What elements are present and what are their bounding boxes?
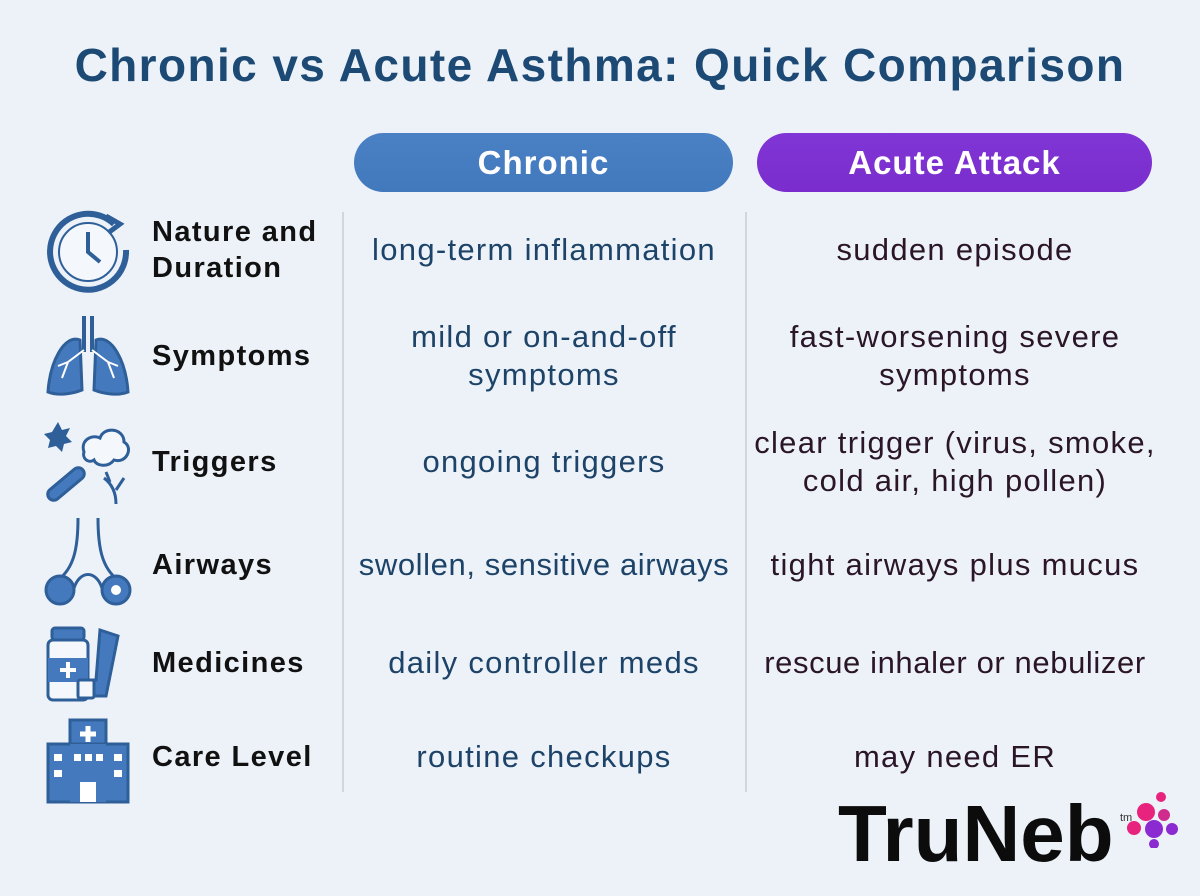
label: Medicines: Medicines	[152, 647, 305, 679]
icon: triggers	[44, 422, 130, 504]
text: swollen, sensitive airways: swollen, sensitive airways	[359, 547, 729, 582]
text: mild or on-and-off symptoms: mild or on-and-off	[411, 319, 677, 354]
text: fast-worsening severe symptoms: fast-worsening severe	[790, 319, 1120, 354]
logo: TruNeb: tm	[1120, 812, 1132, 824]
label: Symptoms: Symptoms	[152, 340, 311, 372]
text: mild or on-and-off symptoms: symptoms	[468, 357, 620, 392]
title: Chronic vs Acute Asthma: Quick Comparison	[75, 39, 1125, 91]
text: sudden episode: sudden episode	[836, 232, 1074, 267]
label: Triggers: Triggers	[152, 446, 278, 478]
header: Chronic: Chronic	[478, 144, 609, 181]
text: tight airways plus mucus: tight airways plus mucus	[771, 547, 1139, 582]
icon: lungs	[46, 316, 130, 396]
text: clear trigger: clear trigger (virus, smoke,	[754, 425, 1156, 460]
label: Nature and Duration	[152, 216, 317, 284]
icon: clock	[47, 210, 130, 293]
text: clear trigger	[754, 425, 1156, 498]
header: Acute Attack: Acute Attack	[848, 144, 1061, 181]
label: Airways: Airways	[152, 549, 273, 581]
icon: medicines	[46, 626, 120, 702]
text: routine checkups: routine checkups	[416, 739, 672, 774]
text: long-term inflammation: long-term inflammation	[372, 232, 716, 267]
label: Care Level: Care Level	[152, 741, 313, 773]
text: mild or on-and-off symptoms	[411, 319, 677, 392]
icon: hospital	[46, 718, 130, 804]
icon: airways	[44, 518, 132, 606]
header: Acute Attack	[757, 133, 1152, 192]
header: Chronic	[354, 133, 733, 192]
text: clear trigger: cold air, high pollen)	[803, 463, 1107, 498]
label: Nature and Duration: Duration	[152, 252, 282, 284]
text: fast-worsening severe symptoms: symptoms	[879, 357, 1031, 392]
text: daily controller meds: daily controller meds	[388, 645, 700, 680]
text: rescue inhaler or nebulizer: rescue inhaler or nebulizer	[764, 645, 1146, 680]
logo: TruNeb: TruNeb	[838, 789, 1114, 878]
text: may need ER: may need ER	[854, 739, 1056, 774]
label: Nature and Duration: Nature and	[152, 216, 317, 248]
text: fast-worsening severe symptoms	[790, 319, 1120, 392]
text: ongoing triggers: ongoing triggers	[422, 444, 666, 479]
